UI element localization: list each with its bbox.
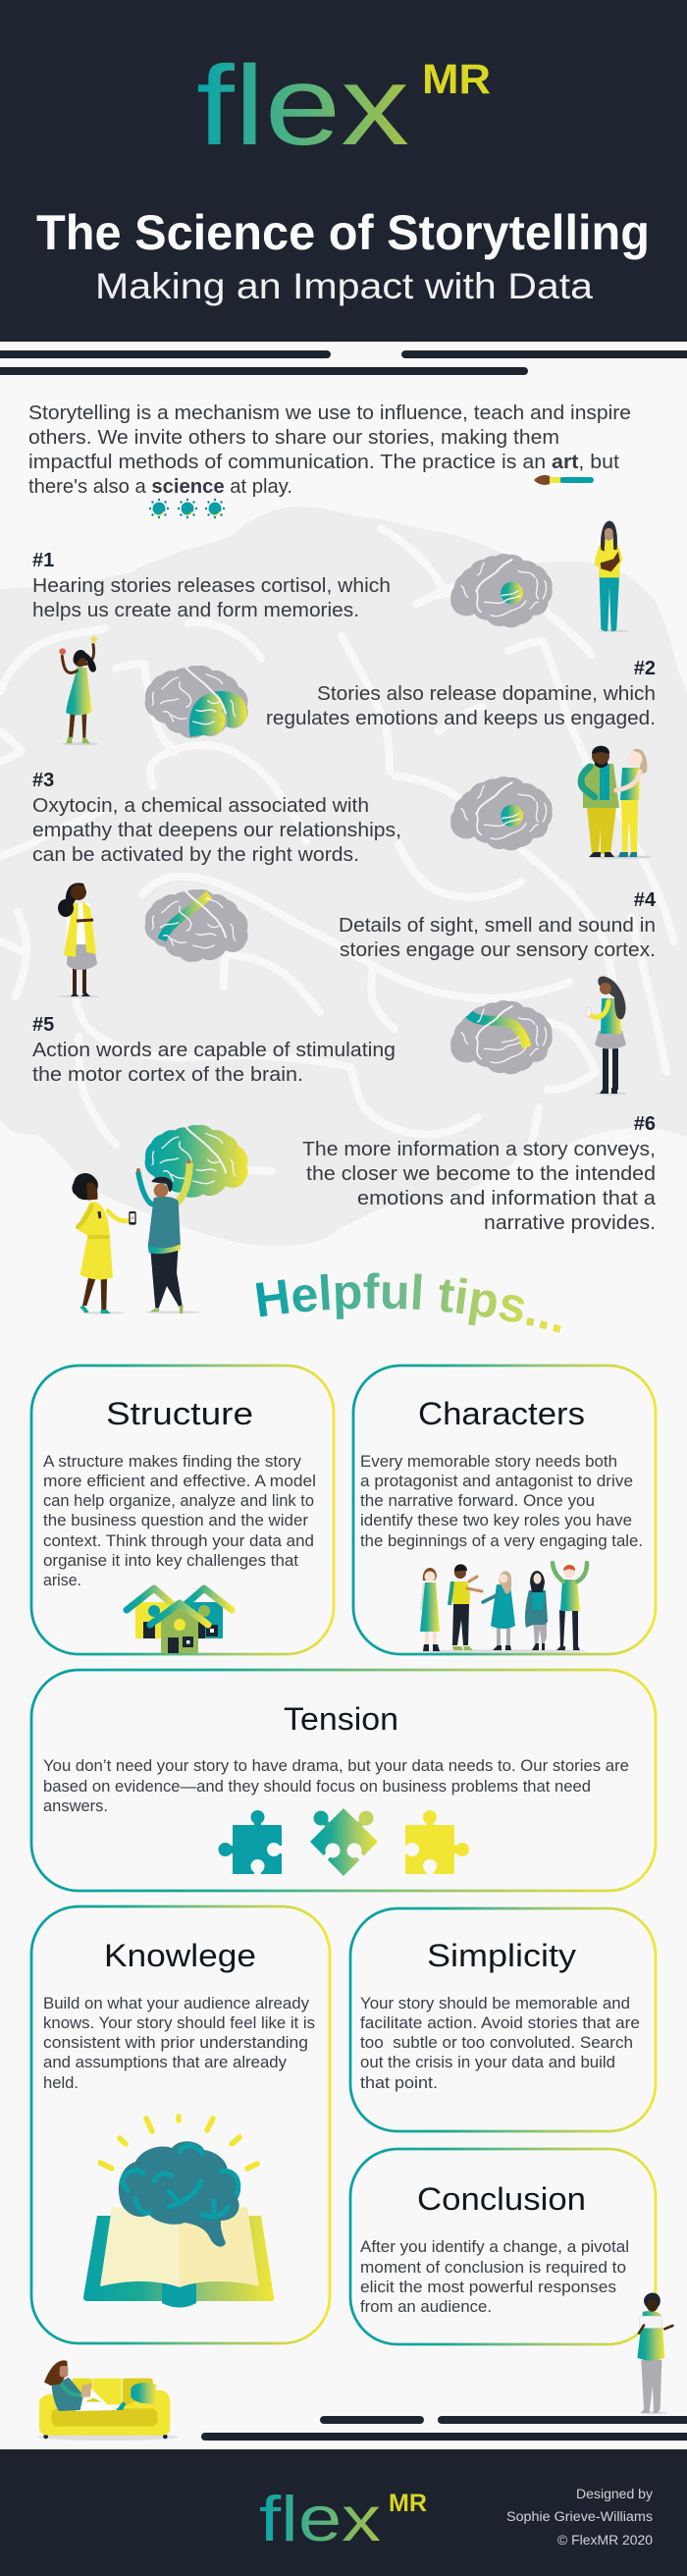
text: Tension body: based on evidence—and they should focus on business problems that need [43,1778,591,1796]
figure 6: two people by brain [72,1159,201,1315]
logo: MR [422,56,491,103]
heading: Knowlege: Knowlege [104,1938,256,1973]
fact 5 text: Action words are capable of stimulating [32,1039,396,1061]
text: Characters body: the beginnings of a very engaging tale. [360,1532,643,1550]
intro text: there's also a science at play. [28,475,292,498]
figure 3: couple [581,746,652,859]
panel: Knowlege [31,1906,330,2343]
fact 5 text: #5 [32,1014,54,1036]
fact 4 text: #4 [634,889,657,911]
text: Simplicity body: out the crisis in your data and build [360,2054,615,2071]
fact 1 text: helps us create and form memories. [32,599,359,621]
heading: Simplicity: Simplicity [427,1938,576,1973]
brain 3 [450,777,553,850]
brain 5 [450,1000,553,1074]
logo [196,43,491,169]
text: Knowlege body: and assumptions that are already [43,2054,288,2071]
brain 1 [450,554,553,627]
heading: Characters: Characters [418,1396,585,1431]
text: Structure body: organise it into key challenges that [43,1552,298,1570]
text: Tension body: You don’t need your story to have drama, but your data needs to. Our stories are [43,1757,629,1775]
background brain silhouette [0,507,687,1246]
fact 6 text: the closer we become to the intended [306,1162,656,1185]
footer credits: Sophie Grieve-Williams [506,2509,653,2524]
text: Simplicity body: too subtle or too convoluted. Search [360,2034,633,2052]
fact 4 text: stories engage our sensory cortex. [340,939,656,961]
text: Simplicity body: that point. [360,2074,438,2092]
fact 6 text [302,1113,657,1234]
fact 5 text [32,1014,396,1086]
fact 6 text: The more information a story conveys, [302,1138,656,1160]
fact 4 text: Details of sight, smell and sound in [339,914,656,937]
text: Characters body: Every memorable story needs both [360,1453,617,1471]
fact 1 text: Hearing stories releases cortisol, which [32,574,391,597]
fact 6 text: #6 [634,1113,656,1135]
footer logo [259,2483,427,2554]
icon: paint brush [534,475,594,485]
text: Knowlege body: Build on what your audience already [43,1995,310,2012]
figure 5: woman with phone [586,977,627,1096]
fact 1 text [32,550,391,621]
fact 2 text [266,658,656,729]
text: Conclusion body: from an audience. [360,2298,492,2316]
footer credits [506,2487,653,2548]
panel: Simplicity [350,1908,656,2131]
brain 6 [145,1125,248,1198]
fact 6 text: narrative provides. [484,1211,656,1234]
panel: Tension [31,1670,656,1891]
panel: Characters [353,1366,656,1654]
text: Characters body: identify these two key roles you have [360,1512,632,1530]
text: Characters body: the narrative forward. Once you [360,1492,595,1510]
text: Simplicity body: facilitate action. Avoid stories that are [360,2014,640,2032]
footer credits: © FlexMR 2020 [557,2533,653,2548]
text: Conclusion body: elicit the most powerful responses [360,2279,616,2296]
icon: five characters [418,1563,587,1653]
icon: science germs [149,499,225,518]
figure: person with laptop [637,2292,672,2414]
text: Structure body [43,1453,316,1589]
brain 2 [145,666,248,738]
footer logo: flex [259,2483,381,2554]
text: Characters body [360,1453,643,1550]
text: Simplicity body [360,1995,640,2092]
icon: teal puzzle piece [218,1810,284,1876]
text: Simplicity body: Your story should be memorable and [360,1995,630,2012]
figure 4: woman in cardigan [58,883,98,997]
text: Conclusion body: After you identify a change, a pivotal [360,2238,629,2256]
fact 2 text: Stories also release dopamine, which [317,682,656,705]
fact 3 text: empathy that deepens our relationships, [32,819,401,841]
fact 2 text: regulates emotions and keeps us engaged. [266,707,656,729]
text: Characters body: a protagonist and antagonist to drive [360,1473,633,1490]
title: The Science of Storytelling [36,205,650,260]
figure: woman reading on sofa [37,2360,179,2441]
fact 6 text: emotions and information that a [357,1187,657,1209]
footer band [0,2449,687,2576]
fact 3 text: can be activated by the right words. [32,843,359,866]
heading: Helpful tips: Helpful tips... [255,1272,561,1333]
brain 4 [145,889,248,962]
text: Structure body: the business question and the wider [43,1512,309,1530]
intro text: Storytelling is a mechanism we use to influence, teach and inspire [28,402,631,424]
text: Knowlege body: consistent with prior understanding [43,2034,308,2052]
text: Structure body: more efficient and effective. A model [43,1473,316,1490]
logo: flex [196,43,409,169]
text: Conclusion body: moment of conclusion is required to [360,2259,626,2277]
fact 4 text [339,889,657,961]
text: Knowlege body: knows. Your story should feel like it is [43,2014,315,2032]
footer logo: MR [389,2490,427,2517]
text: Structure body: can help organize, analyze and link to [43,1492,314,1510]
fact 5 text: the motor cortex of the brain. [32,1063,303,1086]
heading: Conclusion: Conclusion [417,2181,586,2217]
text: Structure body: A structure makes finding the story [43,1453,302,1471]
fact 1 text: #1 [32,550,54,571]
figure 2: girl with apple and star [59,634,98,745]
text: Knowlege body [43,1995,315,2092]
fact 3 text: Oxytocin, a chemical associated with [32,794,369,817]
text: Conclusion body [360,2238,629,2316]
subtitle: Making an Impact with Data [95,266,593,306]
intro text: impactful methods of communication. The practice is an art, but [28,451,619,473]
heading: Tension: Tension [284,1701,398,1737]
icon: gradient puzzle piece [310,1808,378,1876]
intro text [28,402,631,498]
text: Structure body: arise. [43,1572,81,1589]
panel: Structure [31,1366,334,1654]
icon: yellow puzzle piece [403,1810,469,1876]
text: Tension body [43,1757,629,1815]
intro text: others. We invite others to share our stories, making them [28,426,559,449]
icon: open book with glowing brain [83,2117,274,2307]
fact 3 text [32,770,401,866]
header divider bars [0,350,687,375]
footer divider bars [201,2416,687,2441]
heading: Structure: Structure [106,1396,253,1431]
text: Knowlege body: held. [43,2074,79,2092]
icon: houses [127,1588,232,1653]
figure 1: woman with folder [595,521,629,632]
header band [0,0,687,342]
fact 3 text: #3 [32,770,54,791]
text: Structure body: context. Think through your data and [43,1532,314,1550]
fact 2 text: #2 [634,658,656,679]
text: Tension body: answers. [43,1798,108,1815]
panel: Conclusion [350,2149,656,2344]
footer credits: Designed by [576,2487,653,2501]
